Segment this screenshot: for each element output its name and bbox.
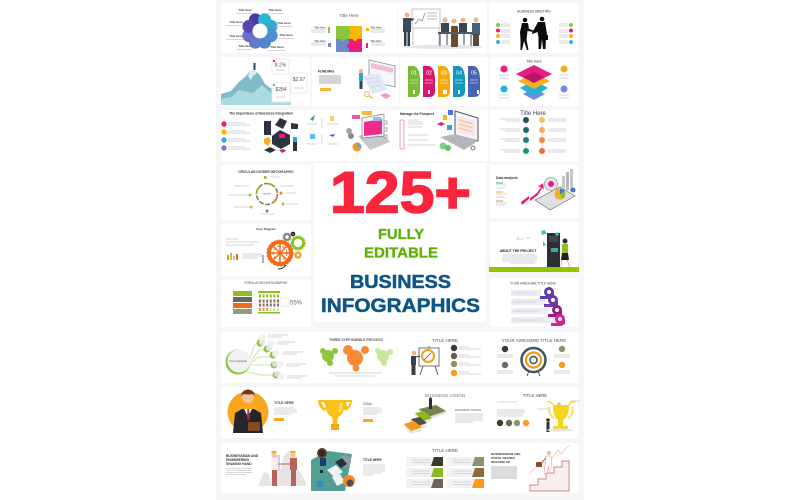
panel: manage the prospect: [400, 110, 488, 161]
panel: four icons and laptop: [307, 110, 400, 161]
chart: three step bubble process: THREE STEP BUBBLE PROCESS: [329, 338, 384, 342]
panel: population infographic: 55%: [290, 300, 303, 306]
illustration: engineers shaking hands: BUSINESSMAN AND: [226, 454, 259, 458]
panel: data analysis: [490, 165, 578, 218]
text: goal: [363, 402, 382, 422]
panel: gear infographic: Title Here: [238, 44, 252, 48]
text: fully editable: FULLY: [378, 226, 424, 243]
panel: gear infographic: Title Here: [238, 8, 252, 12]
panel: mountain with stat cards: [221, 57, 310, 106]
panel: gear infographic: Title Here: [229, 20, 243, 24]
illustration: engineers shaking hands: SHAKING HAND: [226, 462, 252, 466]
panel: gear infographic: Title Here: [229, 34, 243, 38]
panel: row three bottom: [221, 443, 578, 493]
panel: gear infographic: Title Here: [270, 45, 284, 49]
chart: title here banners: TITLE HERE: [432, 448, 458, 453]
panel: puzzle infographic: Title Here: [314, 26, 326, 30]
panel: manage the prospect: Manage the Prospect: [400, 112, 435, 116]
panel: business meeting scene: [398, 3, 487, 53]
panel: circular divider infographic: [221, 165, 311, 220]
panel: numbered tabs 01-05: 01: [411, 70, 417, 76]
chart: presenter with target board: [411, 338, 481, 376]
text: title here: TITLE HERE: [274, 401, 295, 405]
panel: about the project: ABOUT THE PROJECT: [500, 249, 537, 253]
heading: 125+: 125+: [330, 160, 471, 226]
panel: mountain with stat cards: 8.2%: [275, 62, 287, 68]
panel: mountain with stat cards: $284: [275, 87, 287, 93]
illustration: gold cup and person: TITLE HERE: [523, 393, 547, 398]
panel: row one bottom: [221, 332, 578, 383]
panel: numbered tabs 01-05: [400, 57, 488, 106]
panel: title here circles: Title Here: [520, 111, 547, 117]
text: fully editable: [364, 226, 438, 262]
panel: circular divider infographic: CIRCULAR DIVIDER INFOGRAPHIC: [238, 170, 294, 174]
panel: handshake silhouettes: BUSINESS MEETING: [517, 10, 551, 14]
panel: gear diagram: [221, 224, 311, 276]
illustration: business vision steps: BUSINESS VISION: [425, 393, 465, 398]
panel: gear infographic: Title Here: [279, 33, 293, 37]
panel: mountain with stat cards: $2.97: [293, 77, 305, 83]
panel: handshake silhouettes: [489, 3, 578, 53]
panel: funding: [312, 57, 399, 106]
illustration: businessman in orange circle: [228, 390, 268, 433]
panel: puzzle infographic: Title Here: [339, 13, 359, 18]
panel: business integration: The Importance of Business Integration: [229, 112, 293, 116]
text: goal: GOAL: [363, 402, 373, 406]
text: title here: TITLE HERE: [363, 458, 382, 462]
text: title here: [363, 458, 385, 475]
panel: numbered tabs 01-05: 05: [471, 70, 477, 76]
panel: row two bottom: [221, 387, 580, 438]
panel: center headline card: [314, 160, 486, 322]
illustration: team at table: [311, 448, 355, 491]
panel: layered diamonds: [490, 57, 578, 106]
icon: gold trophy: [318, 400, 352, 430]
panel: gear diagram: Gear Diagram: [256, 227, 276, 231]
illustration: businessman walking up stairs: BUSINESSMAN AND: [491, 452, 521, 456]
panel: puzzle infographic: Title Here: [370, 26, 382, 30]
panel: layered diamonds: Title Here: [526, 60, 542, 64]
panel: puzzle infographic: [310, 3, 397, 53]
chart: target: [497, 338, 570, 376]
chart: branching circles: Your Infographic: [229, 360, 248, 363]
chart: target: YOUR AWESOME TITLE HERE: [502, 338, 566, 343]
chart: title here banners: [406, 448, 484, 488]
panel: gear infographic: [221, 3, 310, 53]
chart: presenter with target board: TITLE HERE: [432, 338, 458, 343]
panel: numbered tabs 01-05: 04: [456, 70, 462, 76]
illustration: businessman walking up stairs: [491, 445, 569, 491]
text: title here: [274, 401, 297, 421]
panel: title here circles: [490, 110, 578, 161]
illustration: businessman walking up stairs: STOCK TRADER: [491, 456, 516, 460]
chart: three step bubble process: [320, 338, 393, 376]
panel: business integration: [221, 110, 309, 161]
text: business infographics: BUSINESS: [350, 271, 451, 292]
text: fully editable: EDITABLE: [364, 244, 438, 262]
text: business infographics: INFOGRAPHICS: [321, 296, 480, 317]
panel: funding: FUNDING: [318, 70, 334, 74]
chart: branching circles: [226, 334, 307, 380]
panel: gear infographic: Title Here: [277, 21, 291, 25]
panel: numbered tabs 01-05: 02: [426, 70, 432, 76]
panel: data analysis: Data analysis: [496, 176, 518, 180]
panel: numbered tabs 01-05: 03: [441, 70, 447, 76]
panel: puzzle infographic: Title Here: [370, 40, 382, 43]
illustration: engineers shaking hands: [226, 450, 306, 486]
panel: about the project: [489, 222, 579, 272]
panel: population infographic: POPULATION INFOGRAPHIC: [244, 281, 288, 285]
panel: puzzle infographic: Title Here: [314, 40, 326, 43]
background collage strip: [216, 0, 584, 500]
panel: your awesome title with pins: [490, 278, 578, 327]
illustration: business vision steps: [404, 393, 483, 434]
illustration: business vision steps: BUSINESS VISION: [455, 408, 481, 412]
illustration: engineers shaking hands: ENGINEERING: [226, 458, 250, 462]
panel: population infographic: [221, 280, 311, 327]
illustration: gold cup and person: [497, 393, 580, 432]
panel: your awesome title with pins: YOUR AWESOME TITLE HERE: [510, 282, 556, 286]
illustration: businessman walking up stairs: WALKING UP: [491, 460, 510, 464]
text: business infographics: [321, 271, 480, 317]
panel: gear infographic: Title Here: [268, 8, 282, 12]
